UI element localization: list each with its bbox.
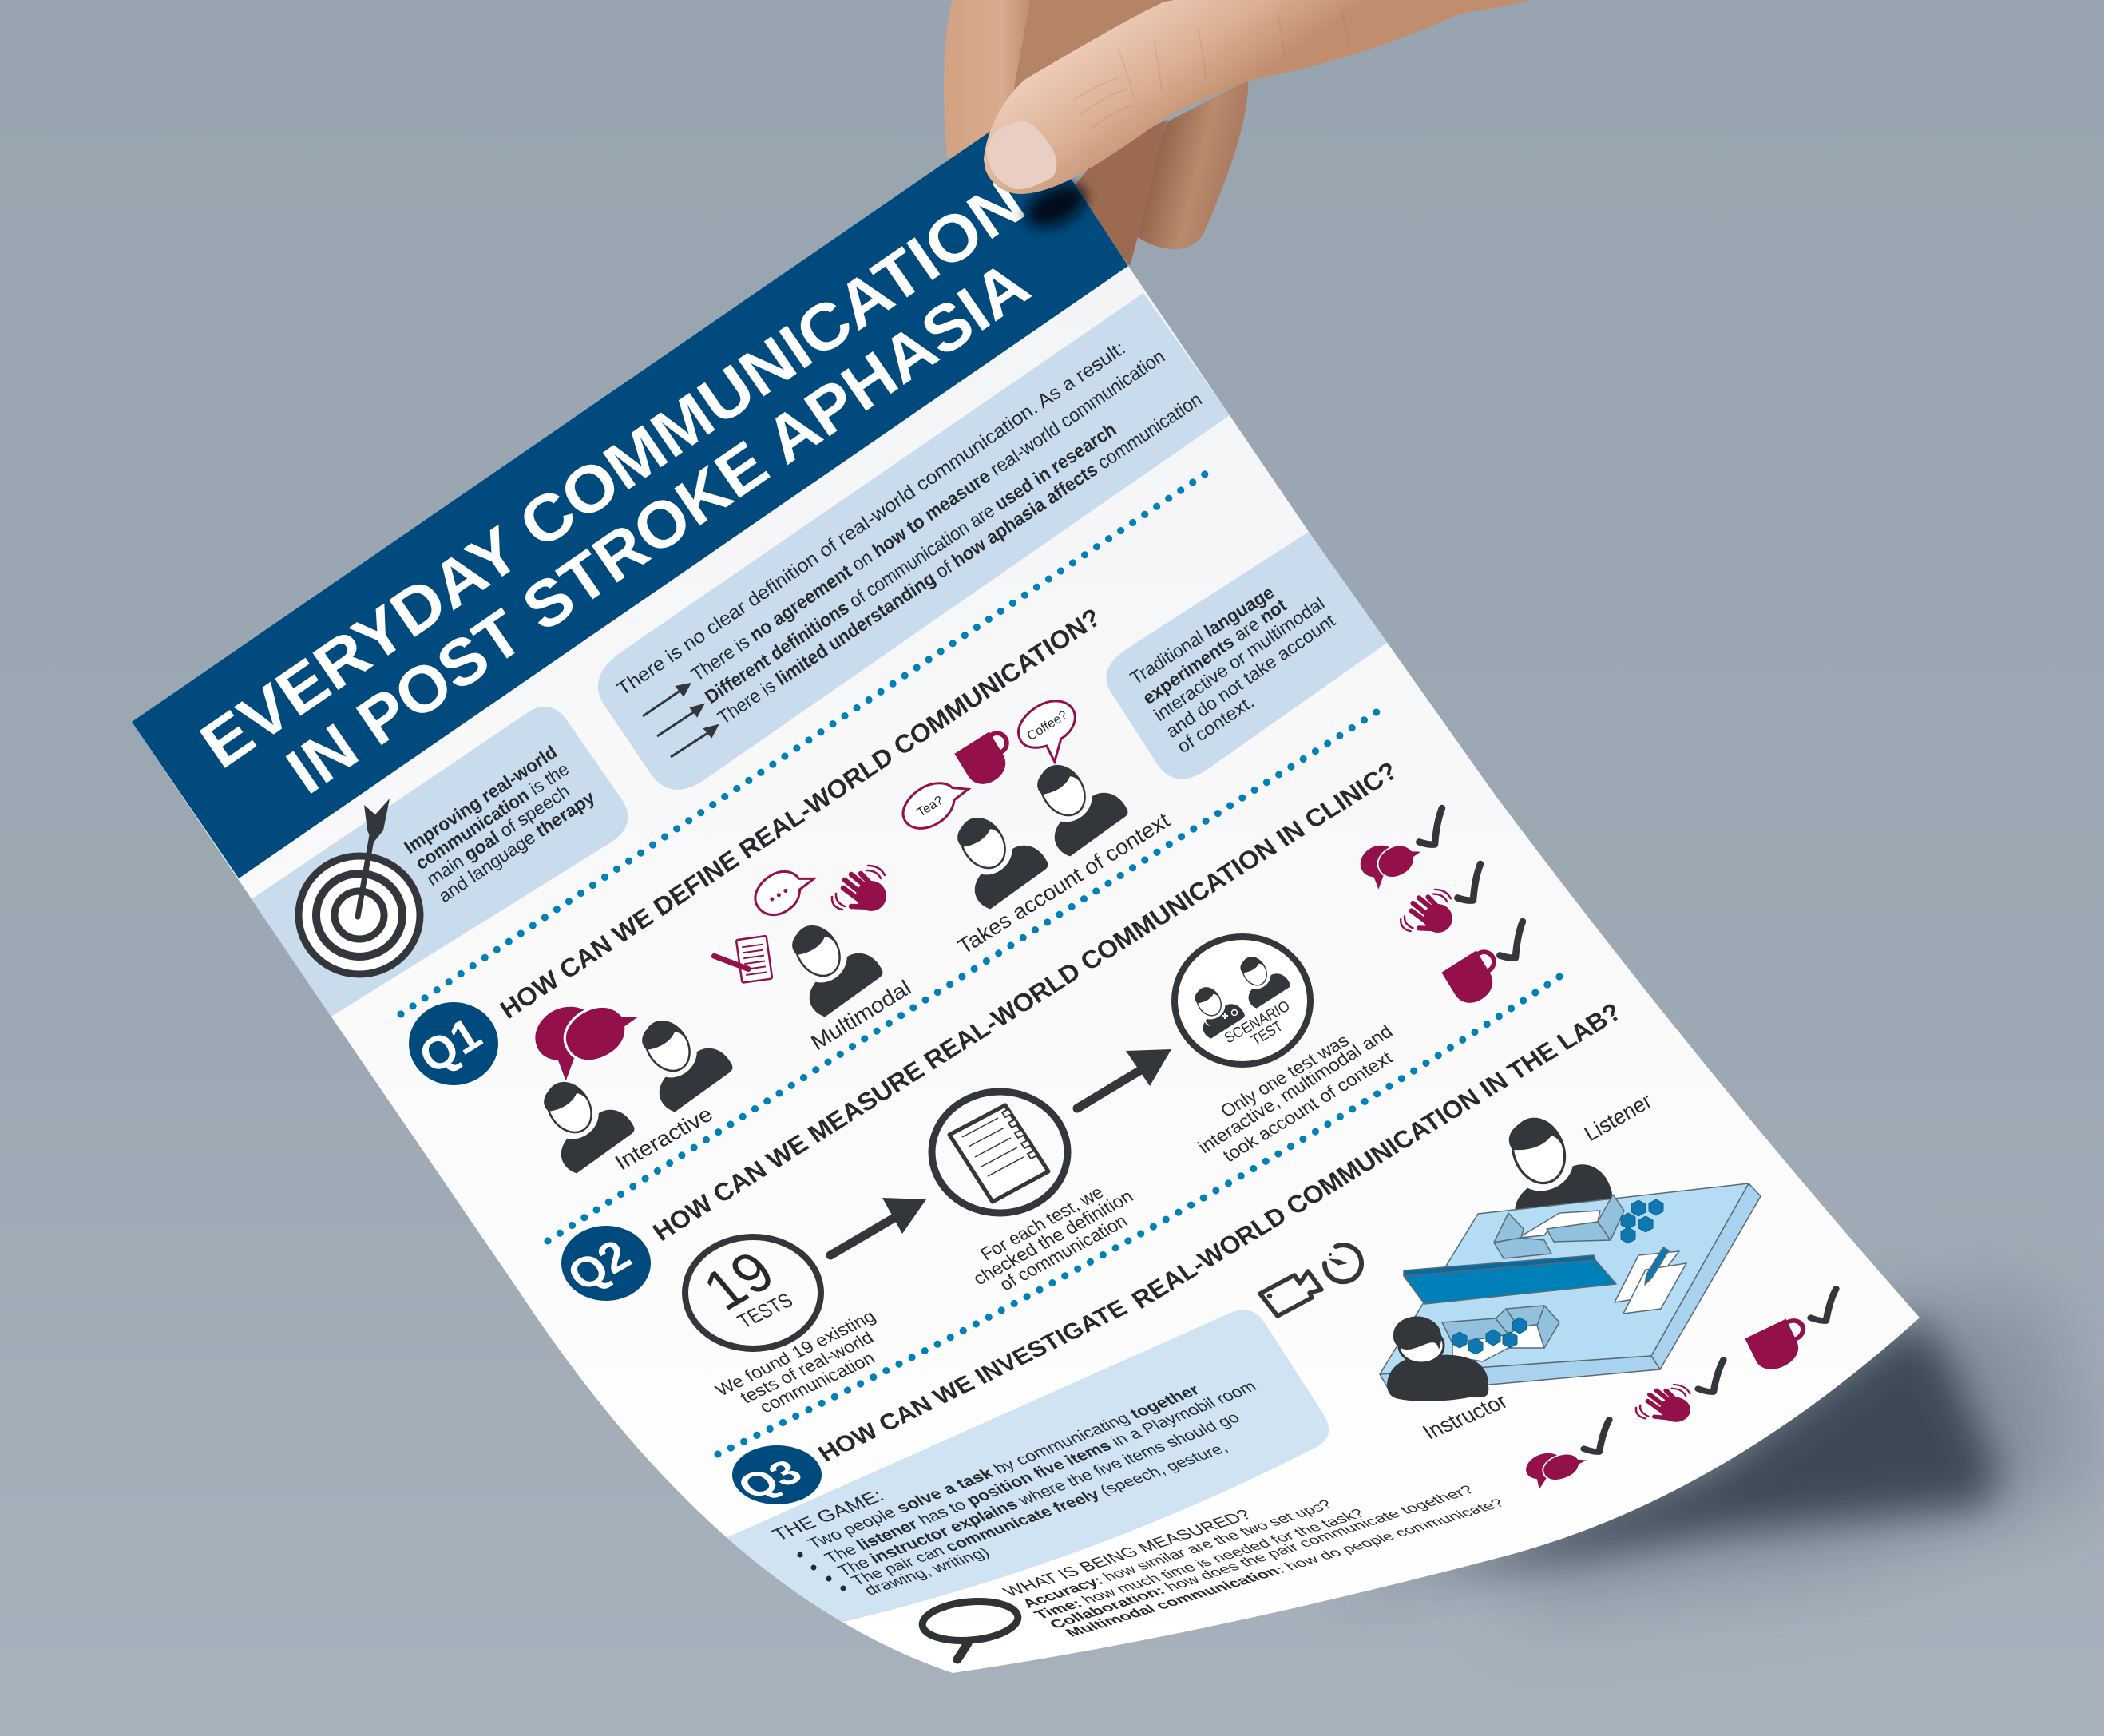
the game text: drawing, writing)	[861, 1544, 993, 1599]
soft shadow under paper	[1317, 1294, 2092, 1607]
Q3 badge: Q3	[728, 1452, 810, 1506]
cubes instructor	[1452, 1318, 1527, 1354]
the game text: Two people solve a task by communicating together	[804, 1381, 1203, 1552]
lab ticks: chat, gesture, mug	[1523, 1289, 1838, 1492]
dotted divider Q2	[548, 711, 1379, 1241]
icon: target with arrow	[299, 799, 420, 974]
19 tests circle	[685, 1237, 821, 1349]
scenario test circle: SCENARIO	[1222, 997, 1293, 1047]
goal text: main goal of speech	[422, 780, 573, 890]
what is being measured text: WHAT IS BEING MEASURED?	[999, 1506, 1255, 1599]
Q3 heading: REAL-WORLD COMMUNICATION IN THE LAB?	[1126, 997, 1627, 1314]
paper sheet	[132, 108, 1920, 1673]
interactive: people and chat	[525, 978, 737, 1176]
back tray	[1494, 1195, 1624, 1258]
Q2 badge: Q2	[557, 1231, 640, 1300]
panel: the game box	[719, 1310, 1329, 1625]
goal text: and language therapy	[434, 787, 599, 906]
Q1 heading: HOW CAN WE DEFINE REAL-WORLD COMMUNICATION?	[495, 602, 1105, 1025]
caption: checklist: checked the definition	[969, 1186, 1137, 1289]
instructor figure	[1387, 1316, 1488, 1401]
sheets and pencil	[1615, 1247, 1686, 1314]
intro text: There is no clear definition of real-world communication. As a result:	[613, 337, 1130, 700]
icon: magnifying glass	[921, 1598, 1020, 1659]
panel: goal box	[252, 707, 628, 1019]
Q3 heading: HOW CAN WE INVESTIGATE	[813, 1294, 1132, 1466]
scenario test circle: TEST	[1249, 1017, 1286, 1049]
intro text: There is limited understanding of how aphasia affects communication	[714, 389, 1206, 729]
goal text: Improving real-world	[400, 741, 561, 858]
icon: video camera	[1260, 1271, 1321, 1316]
hand behind paper	[944, 0, 1248, 266]
scenario test circle	[1175, 937, 1310, 1064]
what is being measured text: Collaboration: how does the pair communicate together?	[1046, 1483, 1478, 1631]
hand: shadow and thumb over paper	[984, 0, 1529, 236]
traditional experiments text: experiments are not	[1139, 594, 1290, 708]
dotted divider Q3	[718, 972, 1567, 1454]
caption: 19 tests: communication	[755, 1348, 878, 1417]
clinic ticks: chat, gesture, mug	[1355, 808, 1527, 1010]
goal text: communication is the	[411, 758, 573, 874]
dotted divider Q1	[401, 467, 1215, 1014]
traditional experiments text: interactive or multimodal	[1150, 593, 1328, 725]
game board illustration	[1380, 1101, 1761, 1401]
traditional experiments text	[1127, 581, 1339, 757]
multimodal: person, document, speech bubble, hand	[712, 857, 887, 1020]
label: interactive: Interactive	[611, 1102, 717, 1175]
caption: scenario test: took account of context	[1218, 1047, 1397, 1166]
the game text: The listener has to position five items in a Playmobil room	[821, 1378, 1260, 1567]
Q2 heading: HOW CAN WE MEASURE REAL-WORLD COMMUNICATION IN CLINIC?	[648, 756, 1403, 1247]
the game text: THE GAME:	[768, 1486, 889, 1545]
title band	[132, 108, 1128, 878]
intro text: Different definitions of communication are used in research	[701, 418, 1120, 708]
title: EVERYDAY COMMUNICATION	[188, 165, 1037, 783]
goal text	[400, 741, 599, 906]
listener figure	[1486, 1101, 1615, 1235]
caption: 19 tests: We found 19 existing	[711, 1306, 879, 1400]
icon: timer	[1325, 1245, 1361, 1282]
traditional experiments text: Traditional language	[1127, 581, 1278, 688]
caption: scenario test: interactive, multimodal and	[1194, 1021, 1397, 1157]
the game text: The instructor explains where the five items should go	[834, 1409, 1243, 1579]
caption: 19 tests: tests of real-world	[736, 1328, 878, 1407]
the game text: The pair can communicate freely (speech, gesture,	[848, 1440, 1231, 1589]
traditional experiments text: and do not take account	[1162, 610, 1339, 742]
cubes listener	[1621, 1199, 1663, 1243]
label: multimodal: Multimodal	[806, 975, 915, 1055]
caption: checklist: of communication	[995, 1211, 1131, 1294]
label: instructor: Instructor	[1418, 1389, 1512, 1444]
19 tests circle: 19	[690, 1239, 787, 1322]
centre divider	[1404, 1255, 1616, 1304]
checklist circle	[932, 1092, 1068, 1213]
19 tests circle: TESTS	[733, 1289, 797, 1333]
arrow 2	[1077, 1049, 1171, 1108]
intro text: There is no agreement on how to measure real-world communication	[687, 346, 1169, 686]
caption: checklist: For each test, we	[976, 1182, 1107, 1264]
label: takes account of context: Takes account of context	[953, 808, 1174, 959]
arrow 1	[830, 1198, 926, 1255]
label: listener: Listener	[1580, 1088, 1656, 1146]
what is being measured text: Multimodal communication: how do people communicate?	[1062, 1497, 1508, 1639]
panel: intro box	[598, 293, 1230, 790]
what is being measured text: Accuracy: how similar are the two set ups?	[1019, 1497, 1337, 1611]
takes account of context: people, mug, bubbles: Coffee?	[1025, 708, 1070, 743]
what is being measured text: Time: how much time is needed for the task?	[1031, 1507, 1369, 1622]
takes account of context: people, mug, bubbles	[895, 692, 1132, 912]
panel: traditional experiments box	[1106, 529, 1389, 779]
front tray	[1442, 1306, 1559, 1361]
traditional experiments text: of context.	[1173, 691, 1258, 757]
Q3 heading	[813, 997, 1627, 1466]
Q1 badge: Q1	[410, 1007, 490, 1084]
takes account of context: people, mug, bubbles: Tea?	[915, 794, 945, 820]
title: IN POST STROKE APHASIA	[275, 247, 1042, 808]
icon: three arrows	[643, 684, 717, 757]
caption: scenario test: Only one test was	[1216, 1030, 1353, 1121]
